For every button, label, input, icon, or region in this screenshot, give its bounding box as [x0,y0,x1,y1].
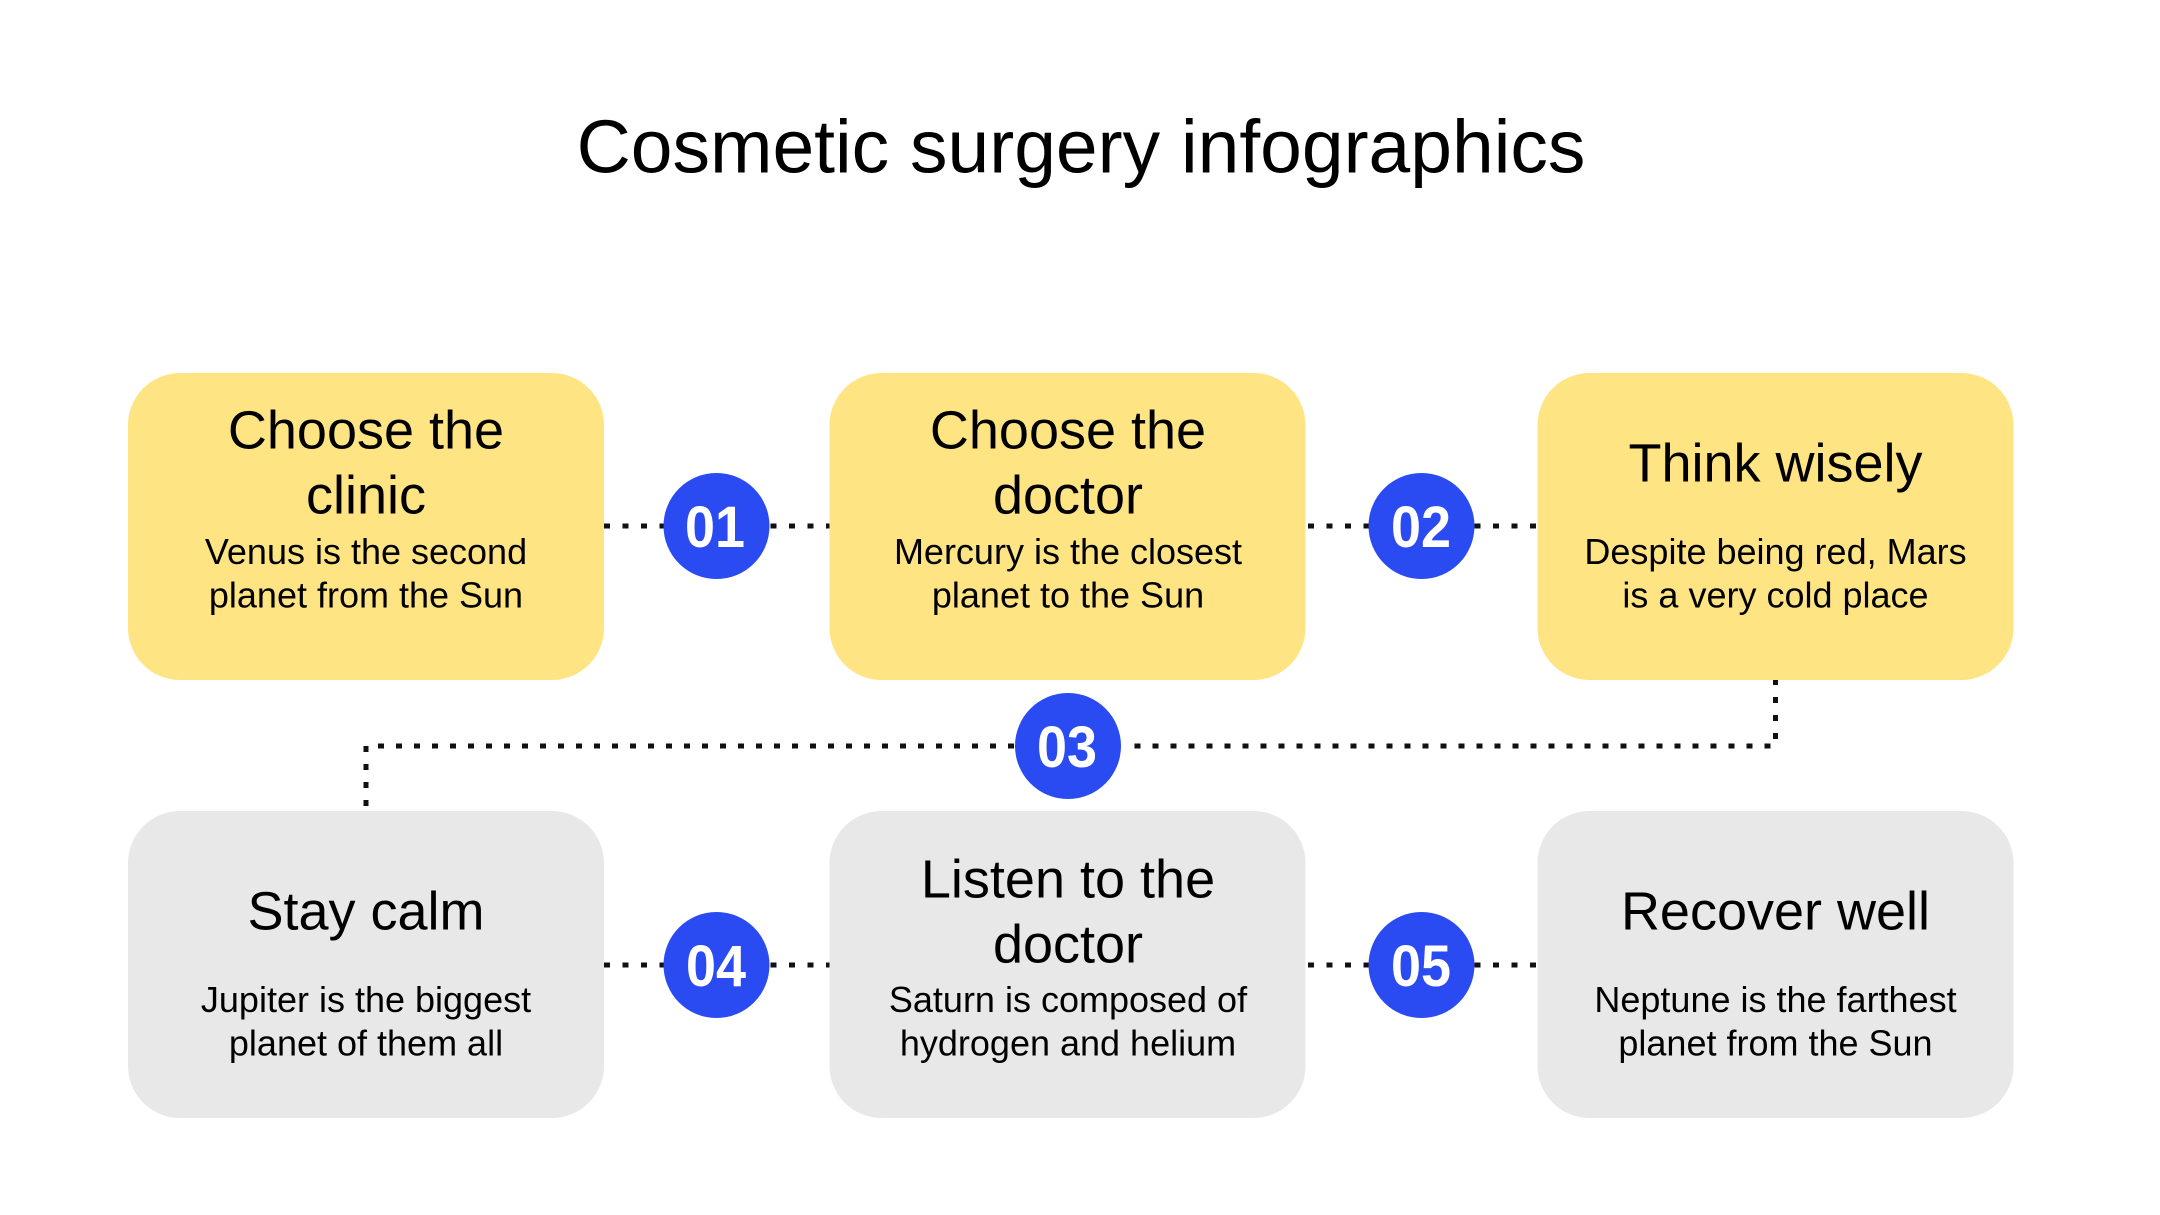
heading: clinic [306,466,426,526]
connector: bottom row [604,962,1537,968]
badge: 01 [664,473,770,579]
text block: Venus is the second [205,531,527,572]
heading: doctor [993,466,1143,526]
text block: planet to the Sun [932,574,1204,616]
text block: Neptune is the farthest [1594,979,1957,1020]
connector: card 3 to card 4 through 03 [366,679,1776,806]
text block: Despite being red, Mars [1584,531,1967,572]
badge: 03 [1015,693,1121,799]
heading: doctor [993,914,1143,974]
heading: Stay calm [247,882,485,942]
text block: hydrogen and helium [900,1022,1236,1064]
text block: Mercury is the closest [894,531,1242,572]
badge: 02 [1368,473,1474,579]
panel: think wisely [1538,373,2014,680]
text block: planet from the Sun [1618,1022,1933,1064]
panel: choose the clinic [128,373,604,680]
heading: Listen to the [921,850,1215,910]
panel: listen to the doctor [830,811,1306,1118]
panel: stay calm [128,811,604,1118]
panel: choose the doctor [830,373,1306,680]
badge: 05 [1368,912,1474,1018]
title: Cosmetic surgery infographics [577,104,1585,188]
text block: Jupiter is the biggest [201,979,531,1020]
text block: planet of them all [229,1022,503,1064]
heading: Think wisely [1628,434,1923,494]
connector: top row [604,524,1537,528]
badge: 01: 01 [685,495,745,560]
badge: 02: 02 [1391,495,1451,560]
text block: planet from the Sun [209,574,523,616]
text block: is a very cold place [1622,574,1929,616]
badge: 03: 03 [1037,715,1097,780]
text block: Saturn is composed of [889,979,1248,1020]
panel: recover well [1538,811,2014,1118]
heading: Choose the [930,400,1206,460]
heading: Recover well [1621,882,1930,942]
badge: 05: 05 [1391,934,1451,999]
badge: 04 [664,912,770,1018]
badge: 04: 04 [686,934,746,999]
heading: Choose the [228,400,504,460]
